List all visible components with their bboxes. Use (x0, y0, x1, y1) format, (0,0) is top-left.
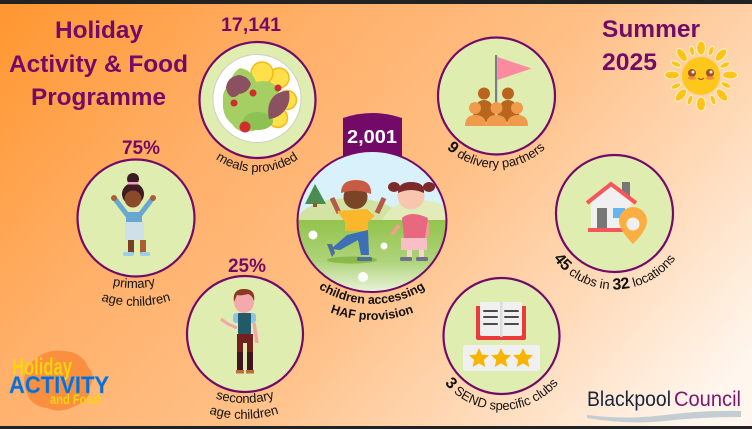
label: secondary age children: secondary (216, 392, 273, 403)
figure: meals count: 17,141 (221, 15, 281, 36)
icon: salad plate (213, 54, 301, 142)
title: Programme (31, 84, 166, 111)
icon: sun (664, 41, 738, 111)
panel: children accessing HAF provision (296, 113, 448, 322)
logo: Holiday Activity and Food (9, 350, 109, 411)
logo: Holiday Activity and Food: ACTIVITY (9, 372, 109, 399)
panel: clubs and locations (554, 154, 675, 290)
label: secondary age children (210, 392, 278, 419)
label: primary age children: primary (112, 278, 154, 290)
season heading (602, 16, 700, 76)
tab: children count (343, 113, 402, 160)
label: primary age children: age children (102, 294, 170, 306)
title (9, 17, 188, 111)
icon: book with stars (463, 302, 540, 371)
logo: Holiday Activity and Food: Holiday (12, 354, 72, 381)
label: children accessing HAF provision: HAF provision (330, 304, 414, 322)
panel: primary age children (76, 138, 196, 306)
label: secondary age children: age children (210, 408, 278, 419)
icon: boy (221, 289, 257, 374)
label: primary age children (102, 278, 170, 306)
title: Holiday (55, 17, 144, 44)
tab: children count: 2,001 (347, 126, 397, 147)
label: 45 clubs in 32 locations: 45 clubs in 32 locations (555, 255, 675, 290)
logo: Blackpool Council: Council (674, 388, 741, 411)
season heading: Summer (602, 16, 700, 43)
label: meals provided: meals provided (216, 151, 298, 175)
illustration: two children playing (298, 180, 446, 291)
logo: Holiday Activity and Food: and Food (50, 391, 100, 407)
label: 9 delivery partners: 9 delivery partners (448, 142, 544, 171)
panel: secondary age children (186, 256, 304, 419)
icon: girl (111, 173, 156, 256)
panel: meals provided (198, 15, 317, 175)
figure: secondary share: 25% (228, 256, 266, 277)
label: 3 SEND specific clubs: 3 SEND specific clubs (446, 378, 558, 413)
panel: SEND specific clubs (442, 276, 561, 413)
logo: Blackpool Council (587, 388, 741, 422)
title: Activity & Food (9, 51, 188, 78)
figure: primary share: 75% (122, 138, 160, 159)
label: children accessing HAF provision: children accessing (320, 283, 426, 304)
label: children accessing HAF provision (320, 283, 426, 322)
icon: flag and group (465, 55, 532, 126)
season heading: 2025 (602, 49, 657, 76)
panel: delivery partners (436, 36, 556, 171)
logo: Blackpool Council: Blackpool (587, 388, 671, 411)
icon: house with map pin (587, 182, 647, 244)
